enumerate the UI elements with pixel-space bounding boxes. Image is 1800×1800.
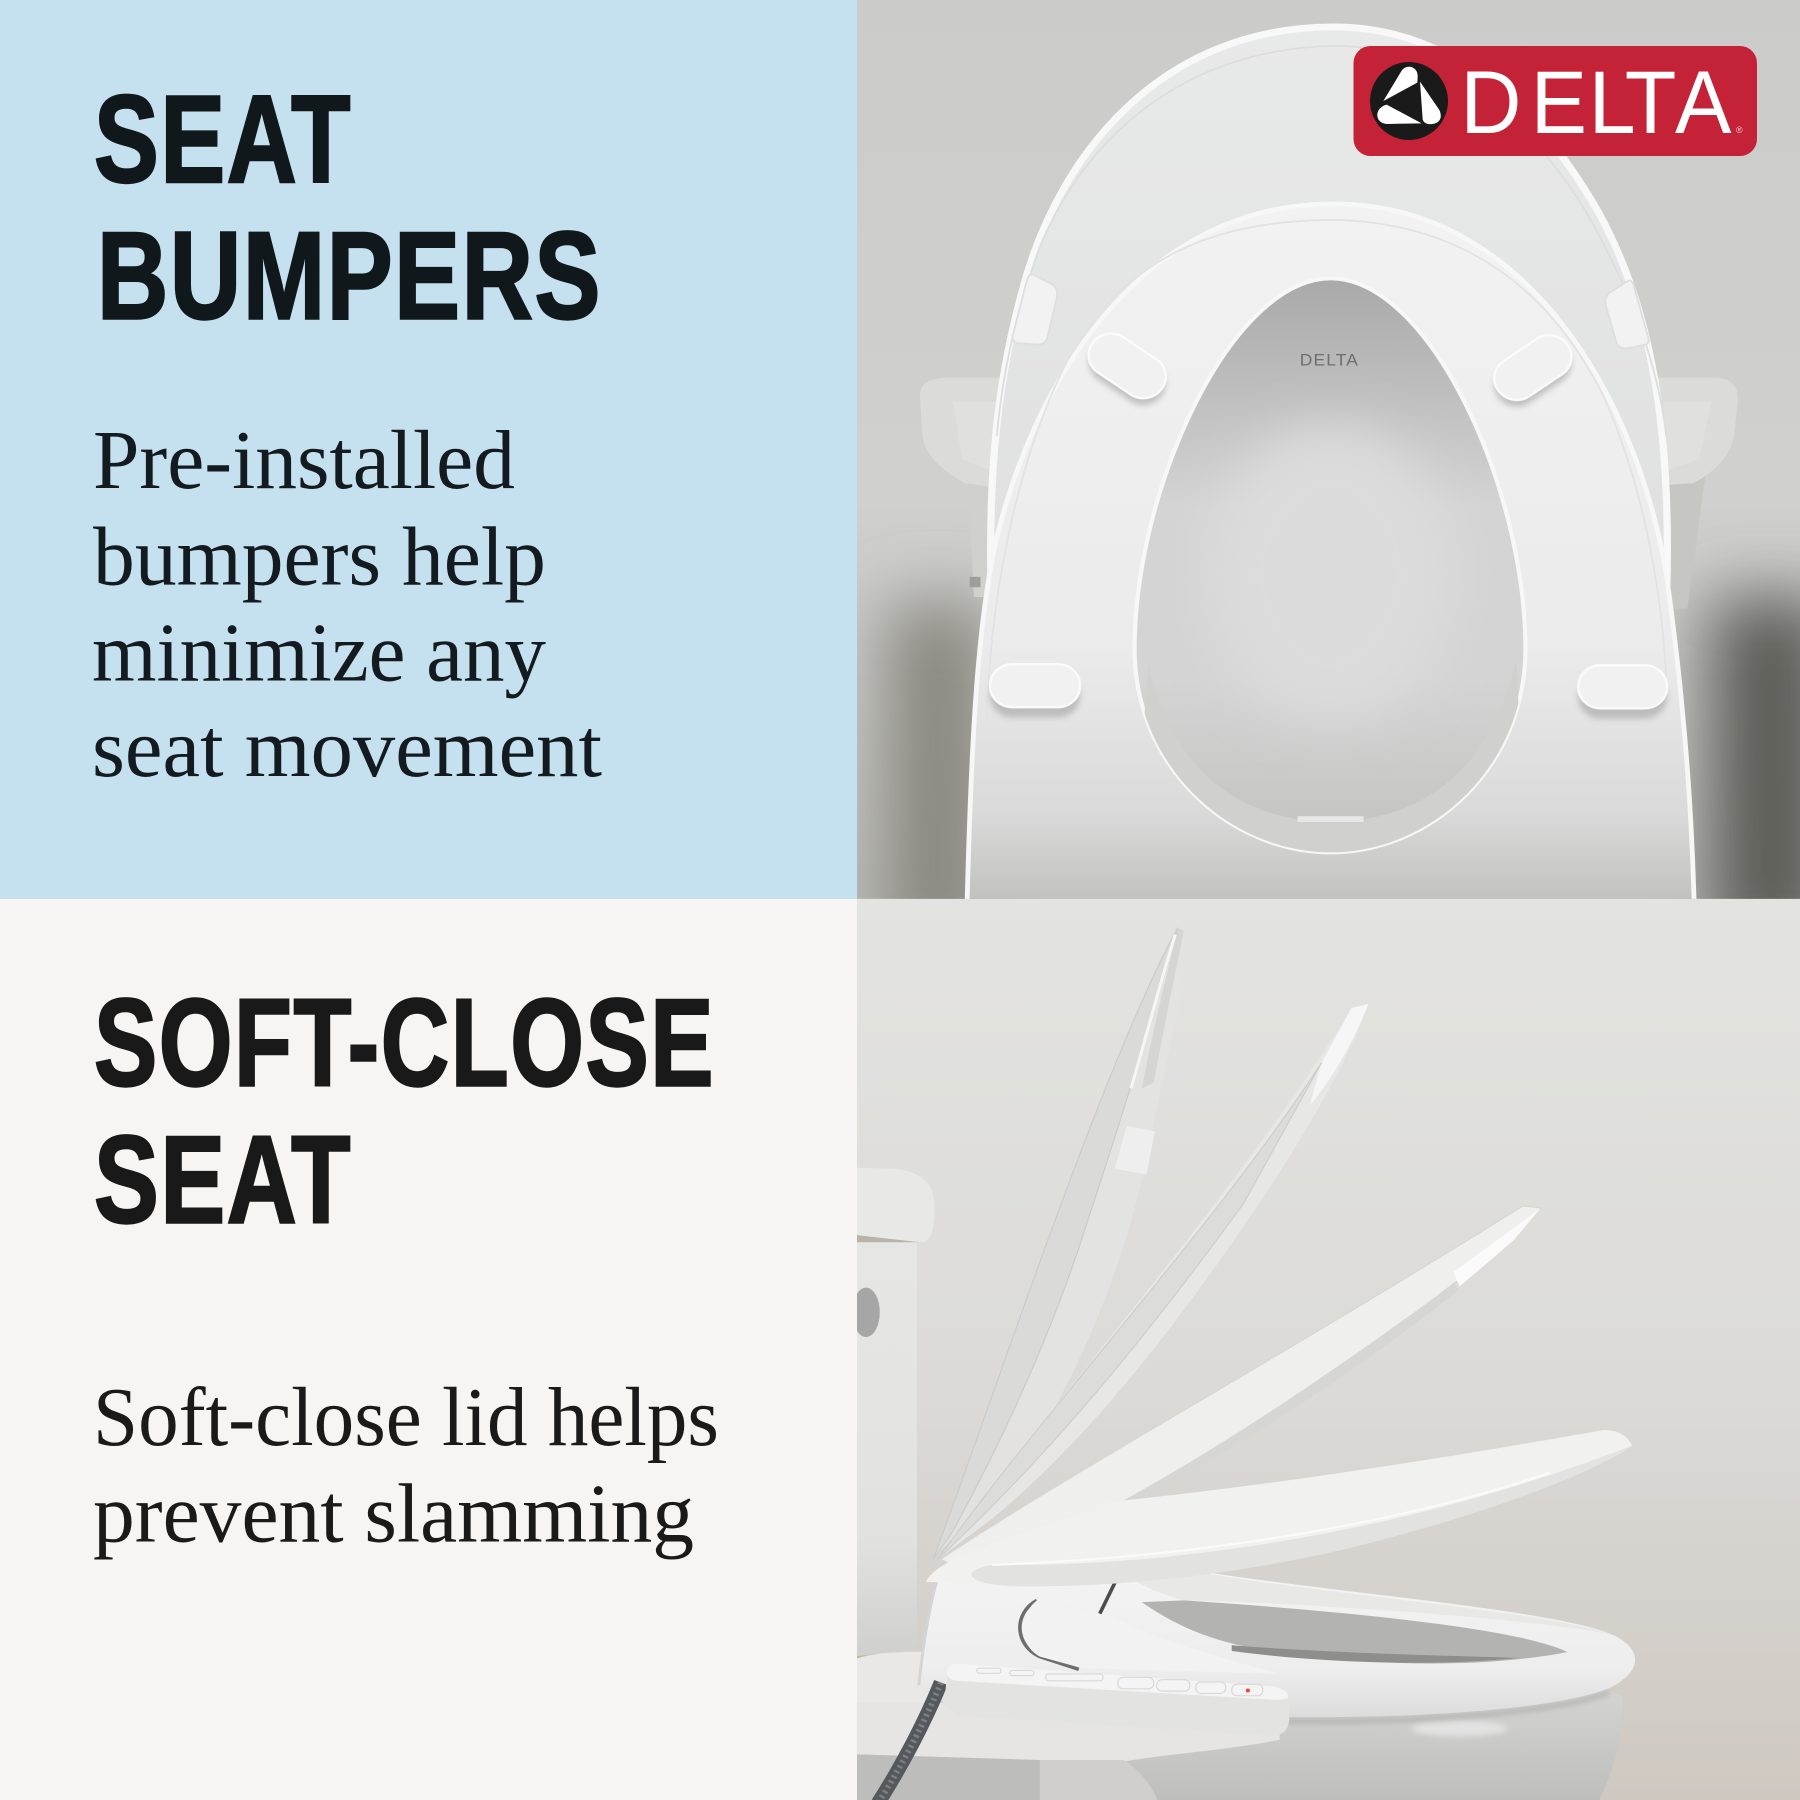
- toilet tank side: [852, 1168, 934, 1671]
- panel: seat bumpers text: [0, 0, 857, 899]
- text block: seat bumpers description: [92, 414, 602, 795]
- logo: Delta badge: [1354, 46, 1757, 156]
- raised lid underside: [987, 24, 1671, 586]
- heading: soft-close seat: SOFT-CLOSE: [94, 974, 715, 1112]
- heading: seat bumpers: BUMPERS: [97, 208, 602, 346]
- heading: seat bumpers: SEAT: [94, 71, 352, 209]
- lid position 2: [938, 1004, 1368, 1559]
- remote buttons: [977, 1668, 1263, 1696]
- support rod: [1098, 1583, 1116, 1614]
- toilet deck and bowl: [854, 1652, 1623, 1800]
- heading: soft-close seat: SEAT: [94, 1112, 352, 1250]
- text block: seat bumpers description: bumpers help: [93, 510, 546, 604]
- text block: seat bumpers description: seat movement: [92, 702, 602, 795]
- lid position 3: [941, 1206, 1541, 1571]
- lid position 4: nearly closed: [926, 1430, 1632, 1586]
- remote control panel: [944, 1664, 1289, 1736]
- red indicator: [1246, 1689, 1250, 1693]
- registered mark: ®: [1736, 125, 1743, 135]
- text block: soft-close description: [93, 1371, 719, 1560]
- text block: soft-close description: prevent slamming: [93, 1468, 694, 1560]
- toilet tank: [920, 378, 1738, 608]
- panel: soft-close seat text: [0, 899, 857, 1800]
- lid position 1: nearly upright: [933, 928, 1184, 1559]
- panel: photo of seat bumpers on raised toilet seat: [857, 0, 1800, 959]
- heading: soft-close seat: [94, 974, 715, 1250]
- seat opening: [1135, 278, 1525, 861]
- bumper shadows: [990, 332, 1667, 719]
- lid bumper right: [1605, 281, 1649, 348]
- bumper upper right: [1493, 334, 1572, 402]
- text block: seat bumpers description: Pre-installed: [93, 414, 515, 507]
- wordmark: DELTA: [1460, 53, 1732, 152]
- text block: seat bumpers description: minimize any: [92, 606, 546, 700]
- closing seat ring: [919, 1565, 1635, 1721]
- wall shadows: [890, 597, 1800, 959]
- panel: photo of soft-close lid in motion: [852, 899, 1800, 1800]
- hose: [878, 1683, 941, 1800]
- lid bumper left: [1013, 274, 1057, 345]
- embossed brand mark: DELTA: [1300, 351, 1359, 370]
- bumper lower right: [1578, 665, 1667, 708]
- icon: Delta triangle mark: [1370, 62, 1448, 140]
- bumper upper left: [1088, 332, 1167, 400]
- heading: seat bumpers: [94, 71, 602, 346]
- text block: soft-close description: Soft-close lid helps: [93, 1371, 719, 1464]
- bumper lower left: [990, 664, 1080, 707]
- seat ring with bumpers: [967, 204, 1695, 918]
